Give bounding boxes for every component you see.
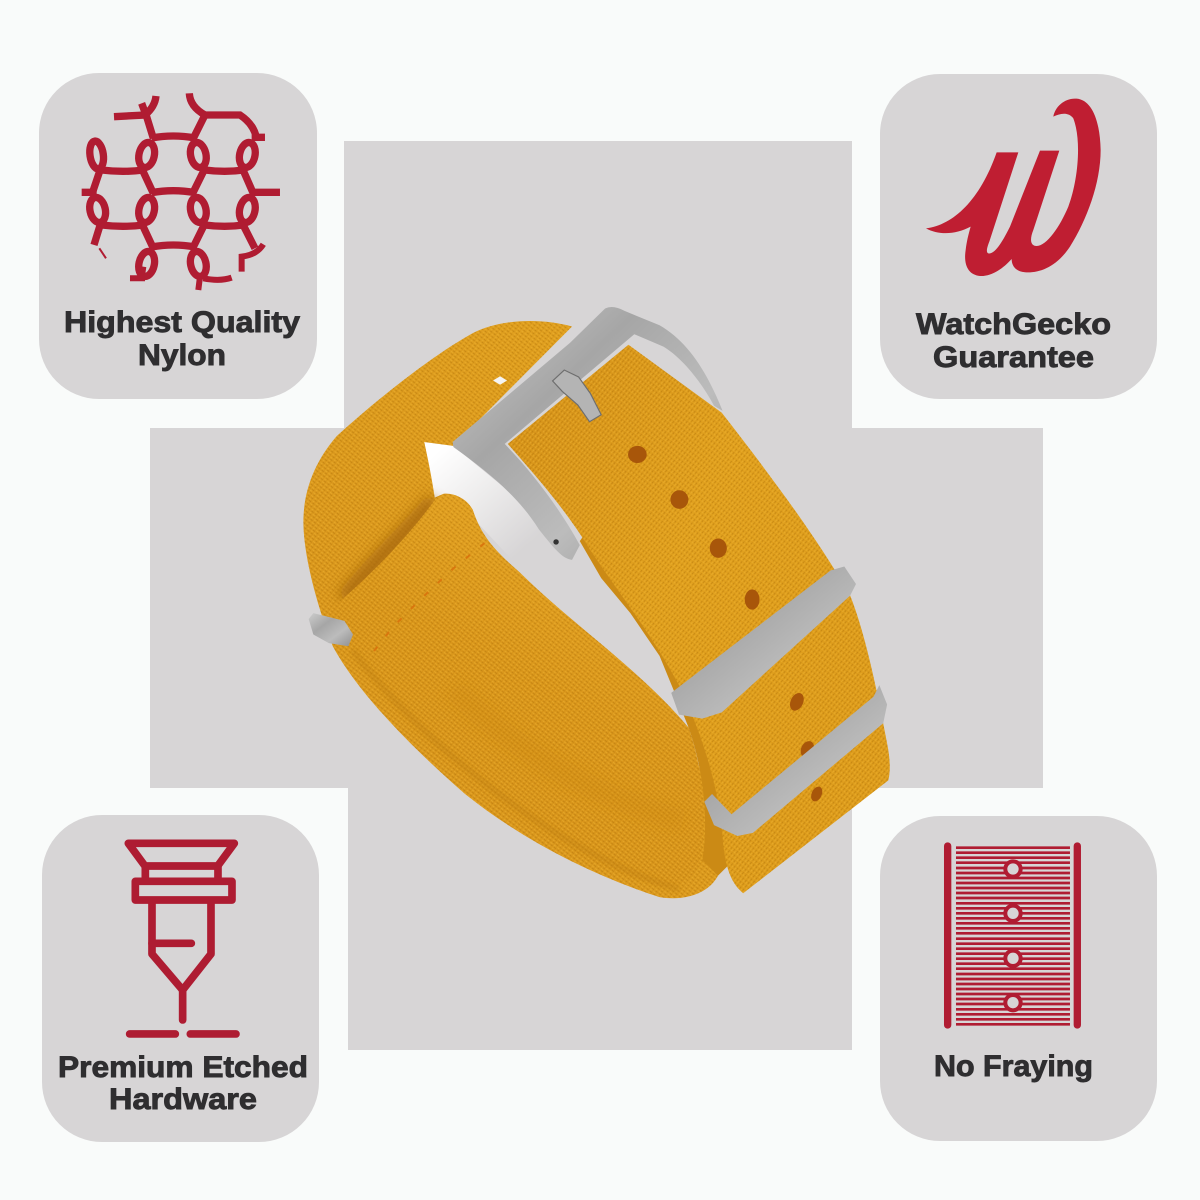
central grey backdrop panel [150, 141, 1043, 1050]
icon: laser etching nozzle [128, 843, 236, 1034]
card background [880, 74, 1157, 399]
front padded band [331, 495, 704, 887]
label: highest quality nylon: Nylon [138, 339, 226, 372]
label: watchgecko guarantee [916, 308, 1111, 374]
card background [880, 816, 1157, 1141]
label: watchgecko guarantee: Guarantee [933, 341, 1094, 374]
label: highest quality nylon [64, 306, 300, 372]
card background [39, 73, 317, 399]
card background [42, 815, 319, 1142]
panel: watchgecko guarantee [880, 74, 1157, 399]
keeper loop 1 [671, 566, 856, 719]
buckle tongue [553, 370, 601, 422]
panel: premium etched hardware [42, 815, 319, 1142]
strap outer layer and back band [303, 321, 720, 898]
keeper loop 2 [704, 685, 887, 836]
icon: woven nylon mesh [82, 93, 280, 290]
label: highest quality nylon: Highest Quality [64, 306, 300, 339]
folded strap layers beneath tail [580, 510, 749, 876]
bright gap inside strap loop [424, 442, 586, 580]
long tail band with holes [508, 345, 890, 893]
left keeper edge [309, 613, 353, 646]
strap holes [628, 446, 825, 803]
product photo: mustard nylon watch strap [303, 307, 890, 898]
small opening in back band [493, 376, 507, 385]
label: watchgecko guarantee: WatchGecko [916, 308, 1111, 341]
icon: WatchGecko W logo [926, 99, 1101, 276]
panel: no fraying [880, 816, 1157, 1141]
stitching line [372, 543, 484, 654]
band shading [352, 650, 679, 889]
icon: woven strap with sealed edges [948, 846, 1077, 1025]
panel: highest quality nylon [39, 73, 317, 399]
label: premium etched hardware: Premium Etched [58, 1051, 308, 1084]
fold shadow [344, 500, 435, 600]
buckle [453, 307, 723, 560]
label: premium etched hardware [58, 1051, 308, 1116]
label: no fraying: No Fraying [934, 1050, 1093, 1083]
label: premium etched hardware: Hardware [109, 1083, 257, 1116]
